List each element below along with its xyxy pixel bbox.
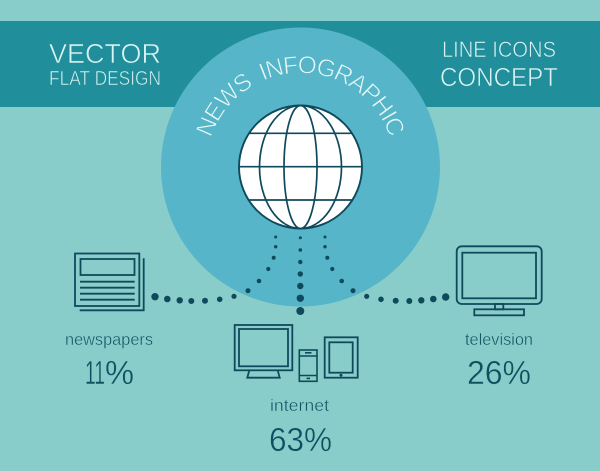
label: internet 63%: [269, 397, 332, 458]
label: newspapers 11%: 11: [85, 354, 105, 391]
icon: television: [457, 246, 542, 315]
icon: desktop monitor: [235, 325, 292, 378]
label: newspapers 11%: [65, 331, 153, 391]
heading: vector flat design: VECTOR: [49, 38, 161, 69]
heading: line icons concept: LINE ICONS: [442, 37, 556, 62]
heading: line icons concept: CONCEPT: [440, 62, 558, 92]
label: internet 63%: internet: [270, 397, 329, 415]
label: television 26%: 26%: [467, 354, 531, 391]
central circle: [161, 28, 440, 306]
heading: vector flat design: FLAT DESIGN: [49, 68, 161, 90]
icon: smartphone: [299, 350, 317, 381]
label: internet 63%: 63%: [269, 421, 332, 458]
header band: [0, 21, 600, 107]
heading: line icons concept: [440, 37, 558, 92]
icon: globe: [239, 106, 362, 228]
icon: tablet: [325, 337, 358, 378]
label: television 26%: television: [465, 331, 533, 349]
label: newspapers 11%: newspapers: [65, 331, 153, 349]
curved title: NEWS INFOGRAPHIC: [196, 56, 404, 136]
icon: newspaper: [75, 254, 144, 310]
label: newspapers 11%: %: [105, 354, 134, 391]
dotted connector: internet: [296, 236, 304, 315]
dotted connector: television: [323, 236, 449, 304]
heading: vector flat design: [49, 38, 161, 90]
dotted connector: newspapers: [151, 236, 277, 304]
label: television 26%: [465, 331, 533, 391]
